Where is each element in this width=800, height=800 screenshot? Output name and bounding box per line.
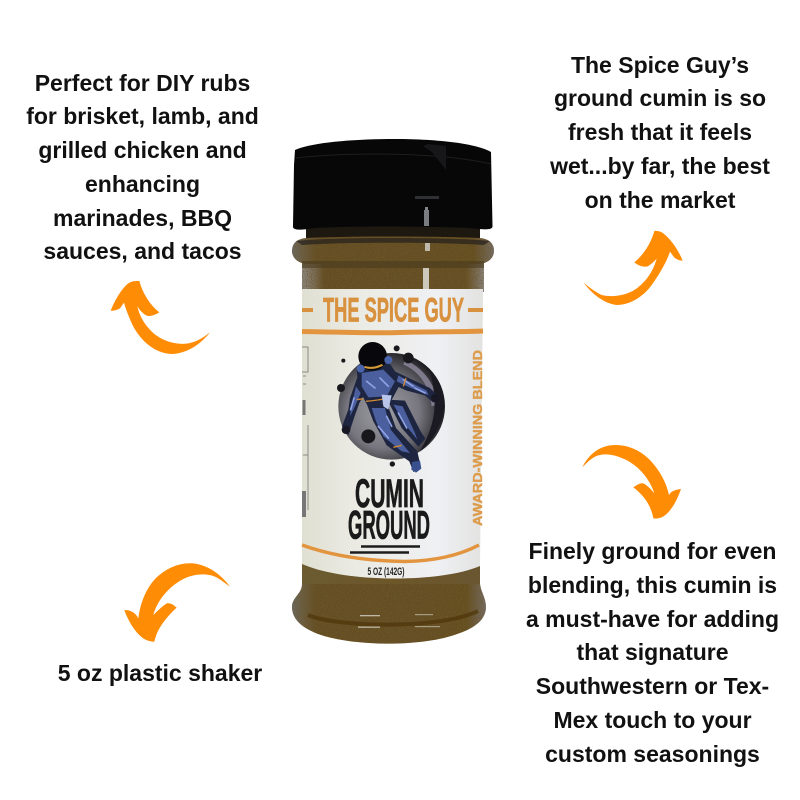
text: freshness quote: on the market xyxy=(585,187,735,213)
jar highlights xyxy=(358,243,440,628)
chest plate xyxy=(382,395,392,410)
label: GROUND xyxy=(348,504,430,548)
text: usage for rubs: Perfect for DIY rubs xyxy=(35,70,250,96)
text: package size: 5 oz plastic shaker xyxy=(58,660,262,686)
text: freshness quote: The Spice Guy’s xyxy=(571,52,749,78)
text: freshness quote: wet...by far, the best xyxy=(550,153,770,179)
jar base shadow line xyxy=(308,611,478,625)
text: freshness quote: fresh that it feels xyxy=(568,119,752,145)
black brush strokes xyxy=(350,546,420,552)
side text: AWARD-WINNING BLEND xyxy=(470,350,485,526)
text: usage for rubs: enhancing xyxy=(85,171,200,197)
suit highlights xyxy=(351,378,425,438)
text: blending description: Finely ground for even xyxy=(529,538,776,564)
text: blending description xyxy=(526,538,779,767)
text: blending description: blending, this cumin is xyxy=(528,572,777,598)
astronaut illustration xyxy=(337,342,445,473)
lid xyxy=(293,139,493,230)
lower jar body xyxy=(302,556,480,600)
brand side dashes xyxy=(302,308,483,312)
orange rule top xyxy=(302,331,483,333)
arrow: top right pointing up to text xyxy=(583,231,683,305)
product bottle xyxy=(292,139,494,644)
text: blending description: that signature xyxy=(576,639,729,665)
jar base ring xyxy=(292,584,486,644)
arrow: bottom right pointing down to text xyxy=(582,445,681,519)
brand name: THE SPICE GUY xyxy=(323,292,464,330)
text: blending description: a must-have for adding xyxy=(526,606,779,632)
text: freshness quote: ground cumin is so xyxy=(554,85,766,111)
text: blending description: Southwestern or Tex- xyxy=(536,673,769,699)
product name: CUMIN xyxy=(355,472,424,516)
text: usage for rubs: for brisket, lamb, and xyxy=(26,103,259,129)
helmet xyxy=(358,342,387,371)
text: usage for rubs xyxy=(26,70,259,264)
jar top ring xyxy=(292,236,494,264)
orange rule bottom xyxy=(302,545,479,562)
text: usage for rubs: marinades, BBQ xyxy=(53,205,232,231)
moon dark side xyxy=(420,371,444,451)
suit blue panels xyxy=(350,370,429,453)
text: usage for rubs: sauces, and tacos xyxy=(43,238,242,264)
moon light streak xyxy=(403,360,437,406)
label xyxy=(302,289,485,579)
product name xyxy=(348,472,430,548)
moon xyxy=(338,353,445,460)
net weight: 5 OZ (142G) xyxy=(368,566,405,578)
suit silhouette xyxy=(342,361,439,472)
text: blending description: Mex touch to your xyxy=(553,707,752,733)
jar ring under shadow xyxy=(302,261,484,268)
jar top rim shadow xyxy=(296,238,490,245)
suit orange trim xyxy=(357,378,406,447)
neck xyxy=(306,226,480,242)
craters and dots xyxy=(337,345,414,467)
upper jar body xyxy=(302,260,484,292)
text: usage for rubs: grilled chicken and xyxy=(38,137,247,163)
text: freshness quote xyxy=(550,52,770,213)
nutrition panel fragment xyxy=(302,347,308,517)
text: blending description: custom seasonings xyxy=(545,741,760,767)
arrow: top left pointing up to text xyxy=(111,281,210,354)
gloves and boot xyxy=(342,425,350,434)
arrow: bottom left pointing down to text xyxy=(124,563,230,642)
